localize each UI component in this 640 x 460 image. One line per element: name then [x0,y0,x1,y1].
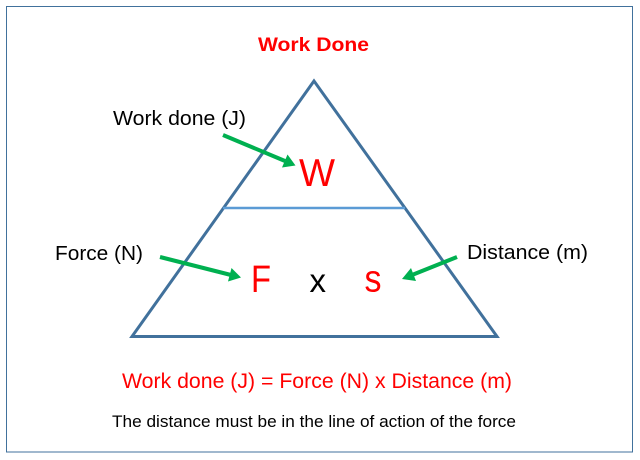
symbol: F: F [251,259,271,301]
triangle divider [223,207,405,209]
arrow: force to F [160,257,241,282]
arrow: distance to s [402,257,457,281]
formula: Work done (J) = Force (N) x Distance (m) [122,370,512,393]
note: The distance must be in the line of action of the force [112,412,516,431]
symbol: W: W [299,152,335,195]
label: distance: Distance (m) [467,242,588,264]
symbol: multiply: x [310,262,326,299]
label: force: Force (N) [55,243,143,265]
label: work done: Work done (J) [113,108,246,130]
triangle outline [132,81,497,336]
symbol: s: s [364,258,382,300]
title: Work Done [258,35,369,56]
triangle diagram [132,81,497,336]
arrow: work done to W [223,135,296,168]
